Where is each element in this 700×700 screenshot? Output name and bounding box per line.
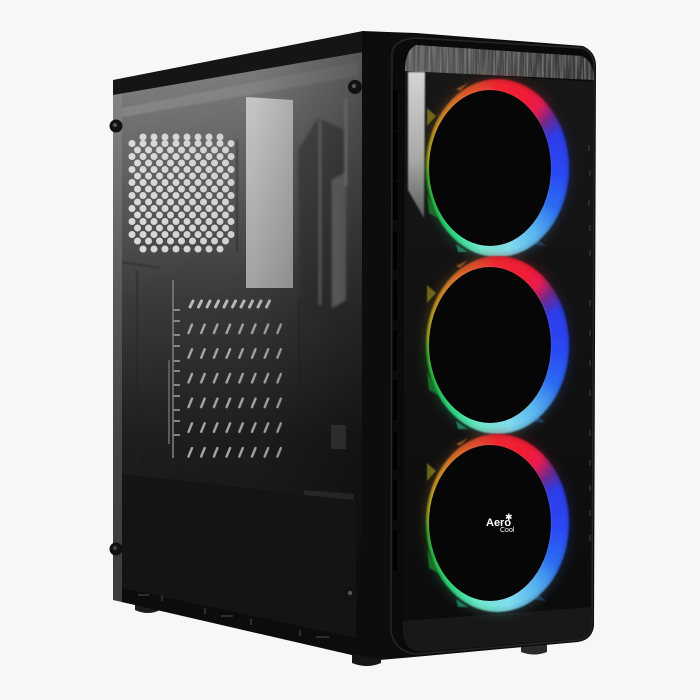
tray dark edges (122, 140, 299, 465)
top slot row (190, 301, 270, 307)
expansion slot column (173, 310, 180, 435)
top edge of case (113, 31, 363, 95)
front column and bezel (362, 31, 596, 660)
fan hub logo: ✱ (505, 512, 513, 522)
right edge indent marks (589, 145, 590, 541)
brushed top strip (405, 45, 594, 80)
screws (110, 80, 362, 601)
fan: top (421, 74, 576, 259)
foot: left rear (135, 600, 160, 613)
shade overlay (113, 50, 363, 656)
bottom frame slots (138, 595, 329, 637)
ventilation honeycomb (128, 134, 234, 252)
fan: bottom (420, 428, 576, 618)
foot: front right (521, 640, 547, 654)
foot: front left (352, 650, 381, 666)
fan: middle (420, 250, 576, 436)
vent notches on left of bezel (393, 90, 397, 570)
drive cut-out (246, 97, 293, 288)
top frame band (122, 62, 358, 117)
inner window (403, 70, 594, 625)
glass reflection (408, 72, 425, 218)
bezel outline (391, 38, 594, 654)
bottom brushed strip (403, 607, 592, 652)
port block (331, 425, 346, 449)
PSU shroud (122, 474, 356, 638)
cable slots (186, 318, 282, 458)
bottom frame (122, 588, 356, 656)
fan hub logo (486, 512, 514, 534)
fan hub logo: Cool (500, 527, 514, 534)
side panel glass (113, 50, 363, 656)
fan hub logo: Aero (486, 517, 511, 529)
right drive bay (298, 98, 346, 340)
